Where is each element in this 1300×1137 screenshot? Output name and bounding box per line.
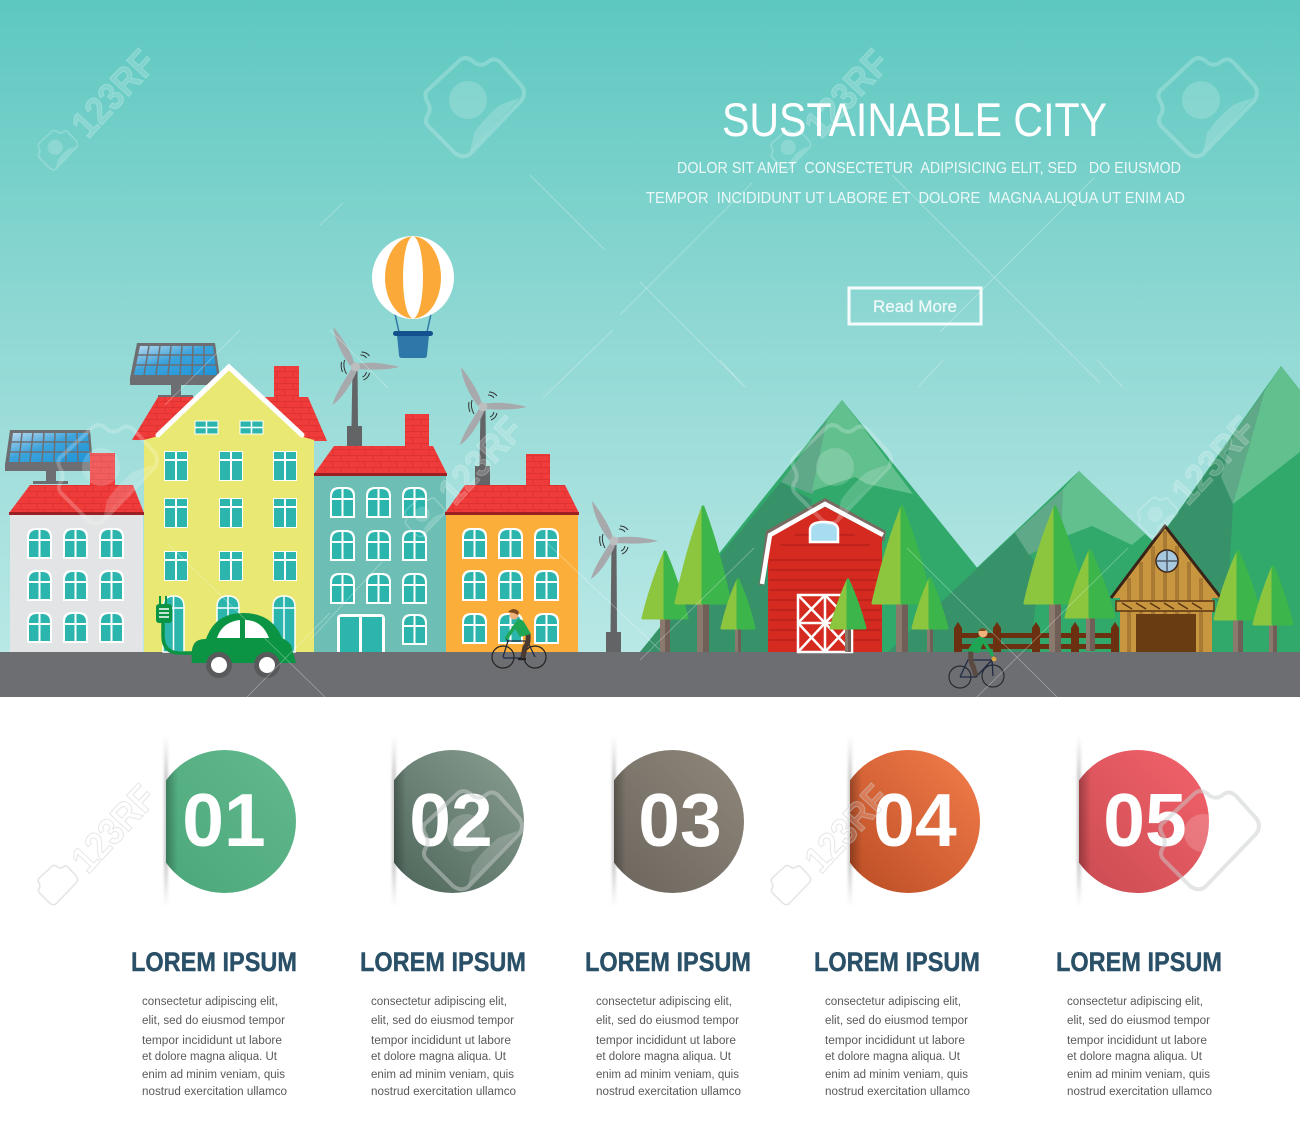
body 4: consectetur adipiscing elit, (825, 996, 961, 1008)
thin diagonal watermark lines (165, 175, 1128, 697)
body 5 (1067, 996, 1212, 1098)
lower watermarks (38, 777, 1259, 905)
body 3: enim ad minim veniam, quis (596, 1069, 739, 1081)
building: yellow (132, 366, 327, 652)
heading 4: LOREM IPSUM (814, 947, 980, 977)
subtitle: DOLOR SIT AMET CONSECTETUR ADIPISICING ELIT, SED DO EIUSMOD (677, 160, 1181, 177)
solar panel right (130, 343, 220, 398)
body 3: tempor incididunt ut labore (596, 1035, 736, 1047)
sky background (0, 0, 1300, 655)
column 2 (360, 735, 526, 1098)
wind turbine 2 (460, 367, 527, 486)
body 1 (142, 996, 287, 1098)
body 2: consectetur adipiscing elit, (371, 996, 507, 1008)
body 3 (596, 996, 741, 1098)
body 2: et dolore magna aliqua. Ut (371, 1051, 507, 1063)
body 4: tempor incididunt ut labore (825, 1035, 965, 1047)
badge 04 (847, 743, 980, 899)
subtitle (646, 160, 1185, 207)
column 4 (814, 735, 980, 1098)
cyclist 2 (949, 628, 1004, 688)
trees (643, 507, 1292, 652)
body 5: enim ad minim veniam, quis (1067, 1069, 1210, 1081)
wooden cabin (1111, 526, 1221, 652)
body 1: enim ad minim veniam, quis (142, 1069, 285, 1081)
body 2: elit, sed do eiusmod tempor (371, 1015, 514, 1027)
body 5: elit, sed do eiusmod tempor (1067, 1015, 1210, 1027)
badge 01 (163, 743, 296, 899)
column 3 (585, 735, 751, 1098)
body 4: enim ad minim veniam, quis (825, 1069, 968, 1081)
wooden fence (954, 622, 1119, 652)
body 3: et dolore magna aliqua. Ut (596, 1051, 732, 1063)
read more button: Read More (873, 297, 957, 316)
mountains (640, 366, 1300, 652)
electric car with plug (156, 596, 296, 678)
solar panel left (5, 430, 93, 484)
badge 05 (1076, 743, 1209, 899)
building: teal (314, 414, 447, 652)
body 1: tempor incididunt ut labore (142, 1035, 282, 1047)
badge 02 (391, 743, 524, 899)
road (0, 652, 1300, 697)
column 1 (131, 735, 297, 1098)
body 4: elit, sed do eiusmod tempor (825, 1015, 968, 1027)
badge 03 (611, 743, 744, 899)
body 3: consectetur adipiscing elit, (596, 996, 732, 1008)
body 1: et dolore magna aliqua. Ut (142, 1051, 278, 1063)
badge 02: 02 (409, 778, 493, 862)
building: grey (9, 453, 144, 652)
badge 04: 04 (873, 778, 957, 862)
sky watermarks (38, 42, 1265, 537)
title: SUSTAINABLE CITY (722, 93, 1107, 146)
body 2: tempor incididunt ut labore (371, 1035, 511, 1047)
body 3: elit, sed do eiusmod tempor (596, 1015, 739, 1027)
building: orange (445, 454, 579, 652)
column 5 (1056, 735, 1222, 1098)
body 1: nostrud exercitation ullamco (142, 1086, 287, 1098)
body 1: elit, sed do eiusmod tempor (142, 1015, 285, 1027)
wind turbine 1 (332, 327, 400, 446)
body 5: et dolore magna aliqua. Ut (1067, 1051, 1203, 1063)
body 5: consectetur adipiscing elit, (1067, 996, 1203, 1008)
badge 03: 03 (638, 778, 722, 862)
body 2: enim ad minim veniam, quis (371, 1069, 514, 1081)
body 5: tempor incididunt ut labore (1067, 1035, 1207, 1047)
hot air balloon (372, 236, 454, 358)
subtitle: TEMPOR INCIDIDUNT UT LABORE ET DOLORE MAGNA ALIQUA UT ENIM AD (646, 190, 1185, 207)
heading 1: LOREM IPSUM (131, 947, 297, 977)
body 5: nostrud exercitation ullamco (1067, 1086, 1212, 1098)
body 4: et dolore magna aliqua. Ut (825, 1051, 961, 1063)
read more button (849, 288, 981, 324)
wind turbine 3 (591, 501, 658, 652)
heading 3: LOREM IPSUM (585, 947, 751, 977)
body 4 (825, 996, 970, 1098)
badge 05: 05 (1103, 778, 1187, 862)
red barn (759, 498, 886, 652)
white lower panel (0, 697, 1300, 1137)
heading 5: LOREM IPSUM (1056, 947, 1222, 977)
badge 01: 01 (182, 778, 266, 862)
body 2 (371, 996, 516, 1098)
heading 2: LOREM IPSUM (360, 947, 526, 977)
body 3: nostrud exercitation ullamco (596, 1086, 741, 1098)
body 4: nostrud exercitation ullamco (825, 1086, 970, 1098)
cyclist 1 (492, 609, 546, 668)
body 2: nostrud exercitation ullamco (371, 1086, 516, 1098)
body 1: consectetur adipiscing elit, (142, 996, 278, 1008)
